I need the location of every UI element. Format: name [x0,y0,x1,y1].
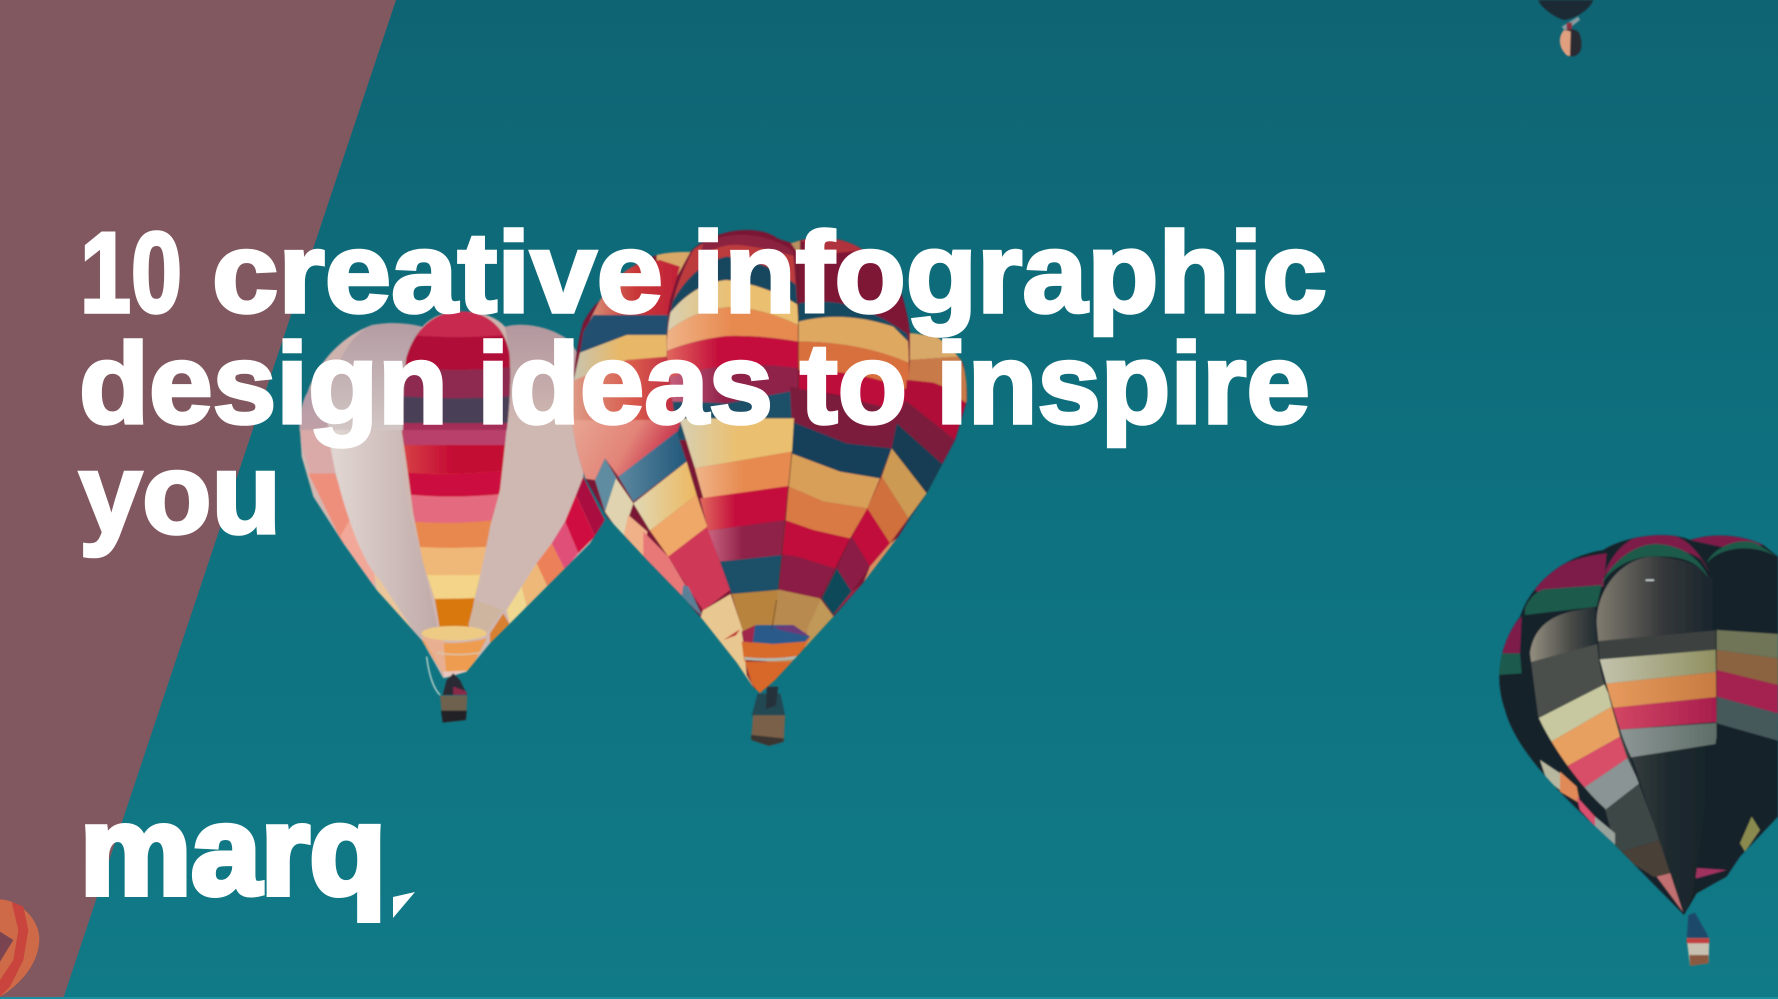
title: creative [212,210,663,337]
title: inspire [936,321,1310,448]
image: dark balloon right [1493,530,1778,966]
title: infographic [692,210,1327,337]
logo: marq: marq [80,780,386,921]
image: small balloon bottom left [0,899,39,997]
image: balloon top right [1538,0,1593,56]
title [79,210,1327,558]
title: ideas [477,321,773,448]
title: you [79,431,281,558]
image: pale left balloon [298,310,606,724]
title: 10 [80,210,182,337]
title: to [800,321,907,448]
bottom edge line [0,997,1778,999]
panel: translucent mauve diagonal [0,0,396,999]
title: design [79,321,448,448]
image: striped right balloon [560,220,980,746]
